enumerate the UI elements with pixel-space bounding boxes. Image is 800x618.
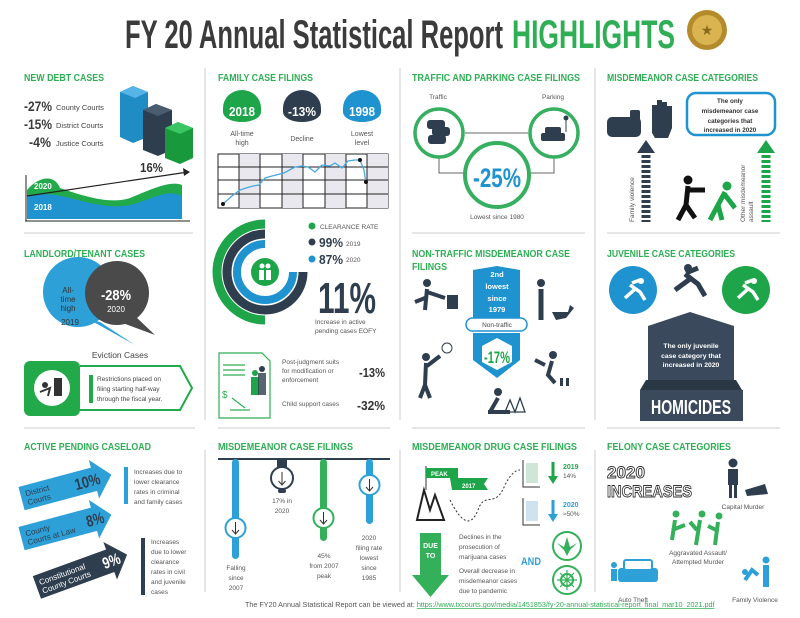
- badge: 2nd lowest since 1979: [466, 266, 527, 378]
- arrow: district courts: 10%: [73, 471, 102, 494]
- monument: homicides: increased in 2020: [663, 362, 720, 369]
- legend: clearance rate: 99%: [319, 235, 343, 250]
- panel: misdemeanor case filings: 1985: [362, 575, 377, 582]
- panel: misdemeanor drug case filings: prosecution of: [459, 544, 500, 551]
- arrow: other misdemeanor assault: [740, 140, 775, 222]
- arrow: due to: TO: [426, 553, 436, 560]
- panel: misdemeanor drug case filings: MISDEMEANOR DRUG CASE FILINGS: [412, 441, 577, 453]
- icon: capital murder: [722, 458, 768, 511]
- icon: charts with arrows: 2020: [563, 502, 579, 509]
- panel: misdemeanor drug case filings: misdemeanor cases: [459, 578, 518, 585]
- diagram: circles: [415, 109, 578, 207]
- panel: traffic and parking: [412, 72, 580, 221]
- panel: landlord/tenant: LANDLORD/TENANT CASES: [24, 248, 145, 260]
- panel: felony case categories: [607, 441, 778, 604]
- panel: misdemeanor drug case filings: Overall decrease in: [459, 568, 515, 575]
- panel: landlord/tenant: [24, 248, 192, 416]
- panel: non-traffic misdemeanor: [412, 248, 574, 412]
- icon: document with gavel: [219, 353, 270, 418]
- monument: homicides: HOMICIDES: [651, 397, 731, 419]
- icon: document with gavel: $: [222, 390, 228, 401]
- gauges: [226, 459, 380, 559]
- arrow: district courts: Courts: [27, 492, 52, 507]
- arrow: district courts: District: [24, 483, 51, 498]
- text: pending notes: rates in civil: [151, 569, 186, 576]
- panel: misdemeanor drug case filings: marijuana cases: [459, 554, 507, 561]
- icon: auto theft: [611, 560, 658, 604]
- icon: speech bubbles: 2020: [107, 305, 125, 314]
- text: debt percentages: Justice Courts: [56, 139, 104, 148]
- icon: speech bubbles: time: [60, 295, 76, 304]
- icon: seal: [687, 10, 727, 50]
- panel: misdemeanor case filings: 45%: [317, 553, 331, 560]
- arrow: other misdemeanor assault: assault: [748, 201, 755, 222]
- panel: misdemeanor drug case filings: [412, 441, 581, 597]
- chart: area 2018 vs 2020: 16%: [140, 160, 163, 175]
- panel: non-traffic misdemeanor: NON-TRAFFIC MISDEMEANOR CASE: [412, 248, 570, 260]
- icon: family violence: [732, 556, 778, 604]
- stat badges: high: [235, 140, 249, 147]
- legend: clearance rate: 87%: [319, 252, 343, 267]
- text: post-judgment stats: Post-judgment suits: [282, 359, 340, 366]
- text: pending notes: [124, 467, 187, 596]
- arrow: family violence: Family violence: [629, 177, 636, 222]
- icon: speech bubbles: All-: [62, 286, 74, 295]
- panel: misdemeanor case filings: 2020: [275, 508, 290, 515]
- badge: 2nd lowest since 1979: 2nd: [490, 270, 504, 279]
- panel: new debt cases: [24, 72, 193, 221]
- callout: only misdemeanor increase: categories that: [708, 118, 753, 125]
- icon: family violence: Family Violence: [732, 597, 778, 604]
- text: pending notes: due to lower: [151, 549, 187, 556]
- text: debt percentages: [24, 98, 104, 150]
- panel: misdemeanor drug case filings: AND: [521, 556, 541, 568]
- icon: peak flag: 2017: [462, 484, 476, 490]
- stat badges: [223, 90, 381, 147]
- arrow: due to: [412, 533, 449, 597]
- text: post-judgment stats: Child support cases: [282, 401, 340, 408]
- text: debt percentages: -4%: [29, 134, 51, 150]
- text: post-judgment stats: for modification or: [282, 368, 334, 375]
- callout: only misdemeanor increase: [687, 93, 775, 135]
- icon: cubes: [120, 86, 193, 164]
- arrow: constitutional county courts: 9%: [100, 551, 123, 573]
- arrow: constitutional county courts: County Courts: [41, 569, 92, 595]
- badge: 2nd lowest since 1979: since: [487, 294, 507, 303]
- text: pending notes: and juvenile: [151, 579, 186, 586]
- monument: homicides: The only juvenile: [663, 343, 719, 350]
- text: pending notes: Increases: [151, 539, 180, 546]
- panel: active pending caseload: [16, 441, 187, 606]
- arrow: county courts at law: 8%: [84, 510, 106, 531]
- chart: area 2018 vs 2020: [25, 160, 190, 221]
- text: pending notes: lower clearance: [134, 479, 180, 486]
- icons: running figures: [609, 264, 770, 314]
- panel: traffic and parking: Parking: [542, 94, 564, 101]
- panel: traffic and parking: TRAFFIC AND PARKING CASE FILINGS: [412, 72, 580, 84]
- icon: aggravated assault: [669, 510, 727, 566]
- heading: 2020 increases: [607, 463, 692, 501]
- icon: auto theft: Auto Theft: [618, 597, 648, 604]
- panel: misdemeanor case filings: since: [361, 565, 377, 572]
- arrow: county courts at law: [16, 495, 117, 558]
- text: pending notes: and family cases: [134, 499, 183, 506]
- callout: only misdemeanor increase: increased in 2020: [704, 127, 757, 134]
- icon: charts with arrows: ≈50%: [563, 511, 580, 518]
- panel: misdemeanor case filings: peak: [317, 573, 332, 580]
- icon: seal: ★: [701, 22, 713, 38]
- text: debt percentages: District Courts: [56, 121, 103, 130]
- stat badges: All-time: [230, 131, 254, 138]
- badge: 2nd lowest since 1979: Non-traffic: [482, 322, 513, 329]
- panel: family case filings: [217, 72, 388, 418]
- panel: misdemeanor case filings: filing rate: [356, 545, 383, 552]
- callout: eviction restrictions: through the fiscal year.: [97, 396, 163, 403]
- icon: charts with arrows: 14%: [563, 473, 576, 480]
- icon: fist and hand: [607, 100, 672, 138]
- icon: assault figures: [678, 176, 735, 220]
- text: pending notes: rates in criminal: [134, 489, 180, 496]
- icon: speech bubbles: [43, 257, 155, 345]
- arrow: constitutional county courts: Constitutional: [38, 562, 87, 587]
- icon: capital murder: Capital Murder: [722, 504, 765, 511]
- panel: misdemeanor drug case filings: Declines in the: [459, 534, 502, 541]
- icon: charts with arrows: 2019: [563, 464, 579, 471]
- icon: aggravated assault: Aggravated Assault/: [669, 550, 727, 557]
- stat badges: 1998: [349, 104, 375, 119]
- text: post-judgment stats: [282, 359, 385, 413]
- chart: area 2018 vs 2020: 2018: [34, 203, 52, 212]
- callout: only misdemeanor increase: The only: [717, 98, 743, 105]
- stat: 11%: [315, 274, 377, 335]
- icon: charts with arrows: [523, 460, 580, 525]
- text: post-judgment stats: enforcement: [282, 377, 318, 384]
- arrow: family violence: [629, 140, 655, 222]
- panel: non-traffic misdemeanor: FILINGS: [412, 261, 447, 273]
- chart: clearance rate donut: [217, 224, 303, 320]
- icon: speech bubbles: high: [60, 304, 76, 313]
- text: post-judgment stats: -13%: [359, 365, 385, 380]
- monument: homicides: case category that: [661, 353, 722, 360]
- text: debt percentages: -15%: [24, 116, 52, 132]
- arrow: county courts at law: County: [24, 523, 51, 538]
- legend: clearance rate: 2020: [346, 257, 361, 264]
- chart: area 2018 vs 2020: 2020: [34, 182, 52, 191]
- text: debt percentages: -27%: [24, 98, 52, 114]
- panel: misdemeanor case filings: from 2007: [309, 563, 339, 570]
- heading: 2020 increases: INCREASES: [607, 482, 692, 501]
- panel: misdemeanor case filings: 17% in: [272, 498, 292, 505]
- badge: 2nd lowest since 1979: 1979: [489, 305, 505, 314]
- badge: 2nd lowest since 1979: lowest: [485, 282, 509, 291]
- text: pending notes: cases: [151, 589, 169, 596]
- legend: clearance rate: CLEARANCE RATE: [320, 224, 379, 231]
- stat badges: Lowest: [351, 131, 373, 138]
- callout: only misdemeanor increase: misdemeanor case: [702, 108, 759, 115]
- stat badges: level: [355, 140, 370, 147]
- stat: 11%: pending cases EOFY: [315, 328, 377, 335]
- stat badges: Decline: [290, 136, 314, 143]
- panel: felony case categories: FELONY CASE CATEGORIES: [607, 441, 731, 453]
- icon: aggravated assault: Attempted Murder: [672, 559, 725, 566]
- icons: cannabis and virus: [553, 532, 581, 594]
- panel: misdemeanor case filings: Falling: [226, 565, 246, 572]
- callout: eviction restrictions: [24, 361, 192, 416]
- text: pending notes: Increases due to: [134, 469, 182, 476]
- panel: misdemeanor case filings: 2020: [362, 535, 377, 542]
- panel: traffic and parking: Lowest since 1980: [470, 214, 524, 221]
- icon: peak flag: PEAK: [431, 472, 448, 478]
- text: pending notes: clearance: [151, 559, 180, 566]
- panel: misdemeanor case categories: MISDEMEANOR CASE CATEGORIES: [607, 72, 758, 84]
- panel: misdemeanor case filings: MISDEMEANOR CASE FILINGS: [218, 441, 353, 453]
- arrow: constitutional county courts: [30, 536, 134, 606]
- icons: offenses: [415, 279, 574, 412]
- panel: misdemeanor case filings: [218, 441, 390, 592]
- panel: misdemeanor case categories: [607, 72, 775, 222]
- diagram: circles: -25%: [473, 163, 521, 193]
- panel: misdemeanor case filings: 2007: [229, 585, 244, 592]
- text: debt percentages: County Courts: [56, 103, 104, 112]
- footer: report link: The FY20 Annual Statistical Report can be viewed at: https://www.txcourts.gov/media/1451853/fy-20-annual-statistical-report_final_mar10_2021.pdf: [245, 600, 714, 609]
- arrow: other misdemeanor assault: Other misdemeanor: [740, 164, 747, 222]
- callout: eviction restrictions: Restrictions placed on: [97, 376, 161, 383]
- title: HIGHLIGHTS: [512, 13, 675, 57]
- title: FY 20 Annual Statistical Report: [125, 13, 503, 57]
- legend: clearance rate: 2019: [346, 241, 361, 248]
- heading: 2020 increases: 2020: [607, 463, 645, 482]
- arrow: county courts at law: Courts at Law: [27, 525, 77, 547]
- icon: speech bubbles: -28%: [101, 287, 131, 304]
- panel: misdemeanor drug case filings: due to pandemic: [459, 588, 508, 595]
- stat: 11%: Increase in active: [315, 319, 366, 326]
- panel: misdemeanor case filings: since: [228, 575, 244, 582]
- panel: traffic and parking: Traffic: [429, 94, 448, 101]
- arrow: due to: DUE: [423, 543, 438, 550]
- stat badges: -13%: [288, 104, 316, 119]
- panel: juvenile: JUVENILE CASE CATEGORIES: [607, 248, 735, 260]
- icon: speech bubbles: 2019: [61, 318, 79, 327]
- text: post-judgment stats: -32%: [357, 398, 385, 413]
- panel: misdemeanor case filings: lowest: [360, 555, 378, 562]
- arrow: district courts: [16, 455, 117, 518]
- badge: 2nd lowest since 1979: -17%: [484, 348, 510, 367]
- panel: active pending caseload: ACTIVE PENDING CASELOAD: [24, 441, 151, 453]
- stat: 11%: 11%: [318, 274, 376, 323]
- stat badges: 2018: [229, 104, 255, 119]
- panel: new debt cases: NEW DEBT CASES: [24, 72, 104, 84]
- panel: family case filings: FAMILY CASE FILINGS: [218, 72, 313, 84]
- legend: clearance rate: [308, 222, 379, 267]
- chart: line grid: [218, 154, 388, 208]
- monument: homicides: [640, 312, 743, 421]
- callout: eviction restrictions: filing starting half-way: [97, 386, 160, 393]
- panel: juvenile: [607, 248, 770, 421]
- icon: peak flag: [417, 466, 520, 521]
- panel: landlord/tenant: Eviction Cases: [92, 350, 148, 360]
